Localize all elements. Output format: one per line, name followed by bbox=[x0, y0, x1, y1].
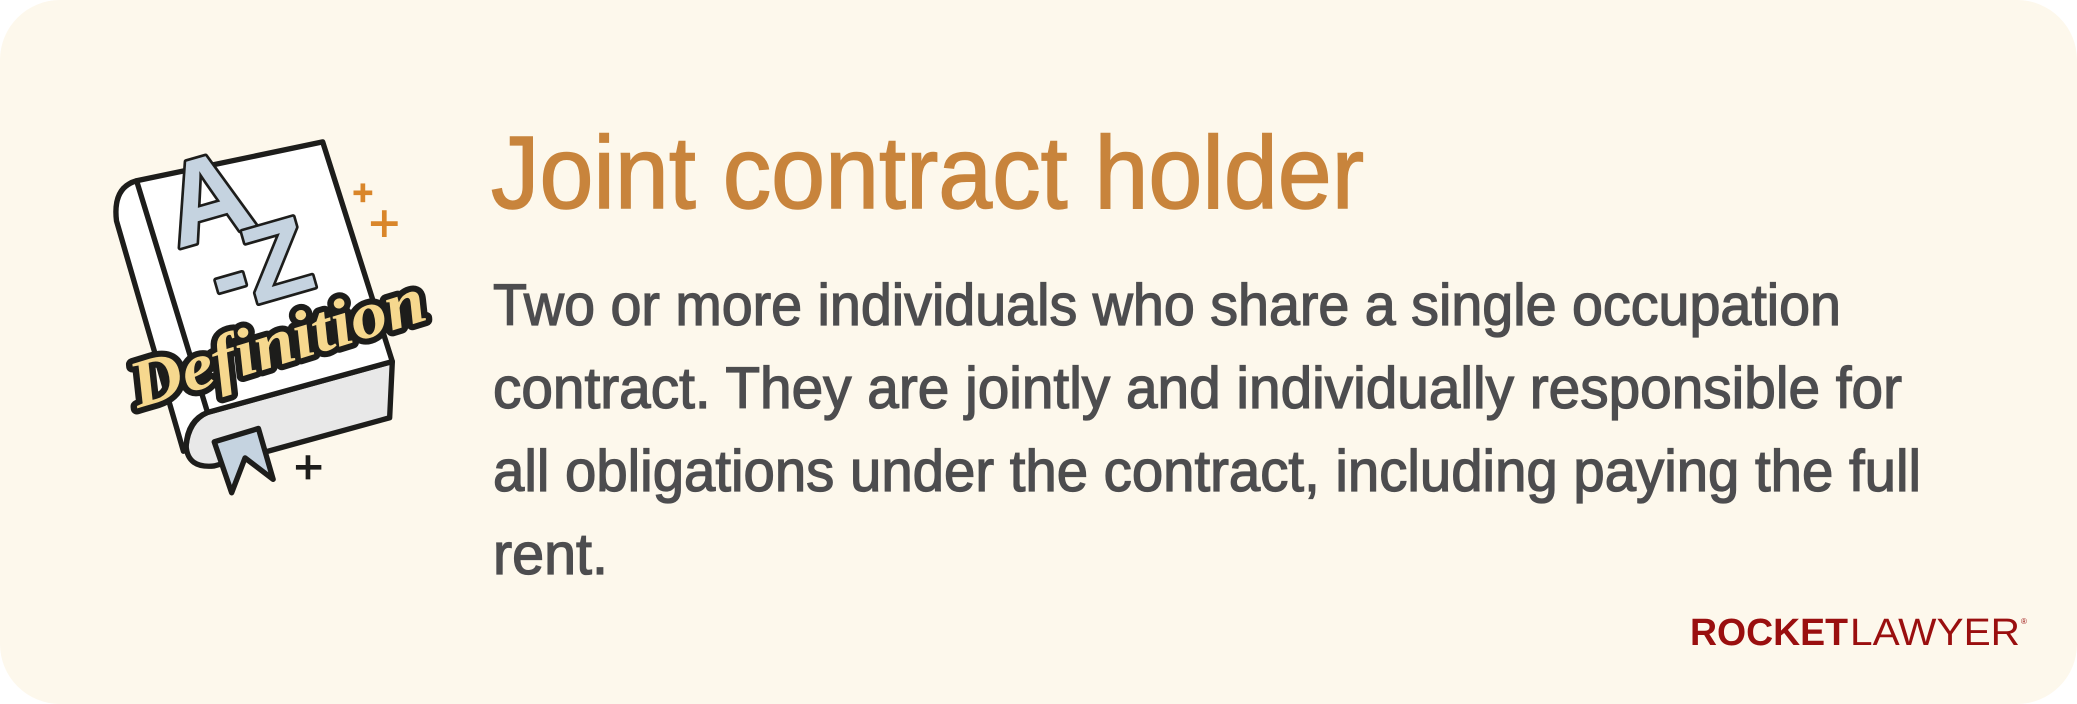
logo: Rocket Lawyer bbox=[1690, 612, 2027, 654]
logo: Rocket Lawyer: LAWYER bbox=[1850, 612, 2020, 654]
body text: rent. bbox=[493, 522, 608, 587]
letters A - Z: -Z bbox=[195, 193, 325, 336]
Definition script: Definition bbox=[120, 263, 434, 423]
body text: Two or more individuals who share a single occupation bbox=[493, 273, 1841, 338]
logo: Rocket Lawyer: ® bbox=[2021, 617, 2027, 626]
body text: all obligations under the contract, including paying the full bbox=[493, 439, 1921, 504]
cover bbox=[116, 142, 392, 451]
body text: contract. They are jointly and individually responsible for bbox=[493, 356, 1902, 421]
bookmark bbox=[214, 428, 273, 493]
pages bbox=[186, 362, 392, 466]
title: Joint contract holder bbox=[491, 115, 1364, 230]
icon: A-Z definition book bbox=[113, 122, 434, 496]
sparkles bbox=[353, 183, 398, 237]
logo: Rocket Lawyer: ROCKET bbox=[1690, 612, 1848, 654]
letters A - Z bbox=[148, 111, 325, 343]
letters A - Z: A bbox=[148, 122, 266, 273]
